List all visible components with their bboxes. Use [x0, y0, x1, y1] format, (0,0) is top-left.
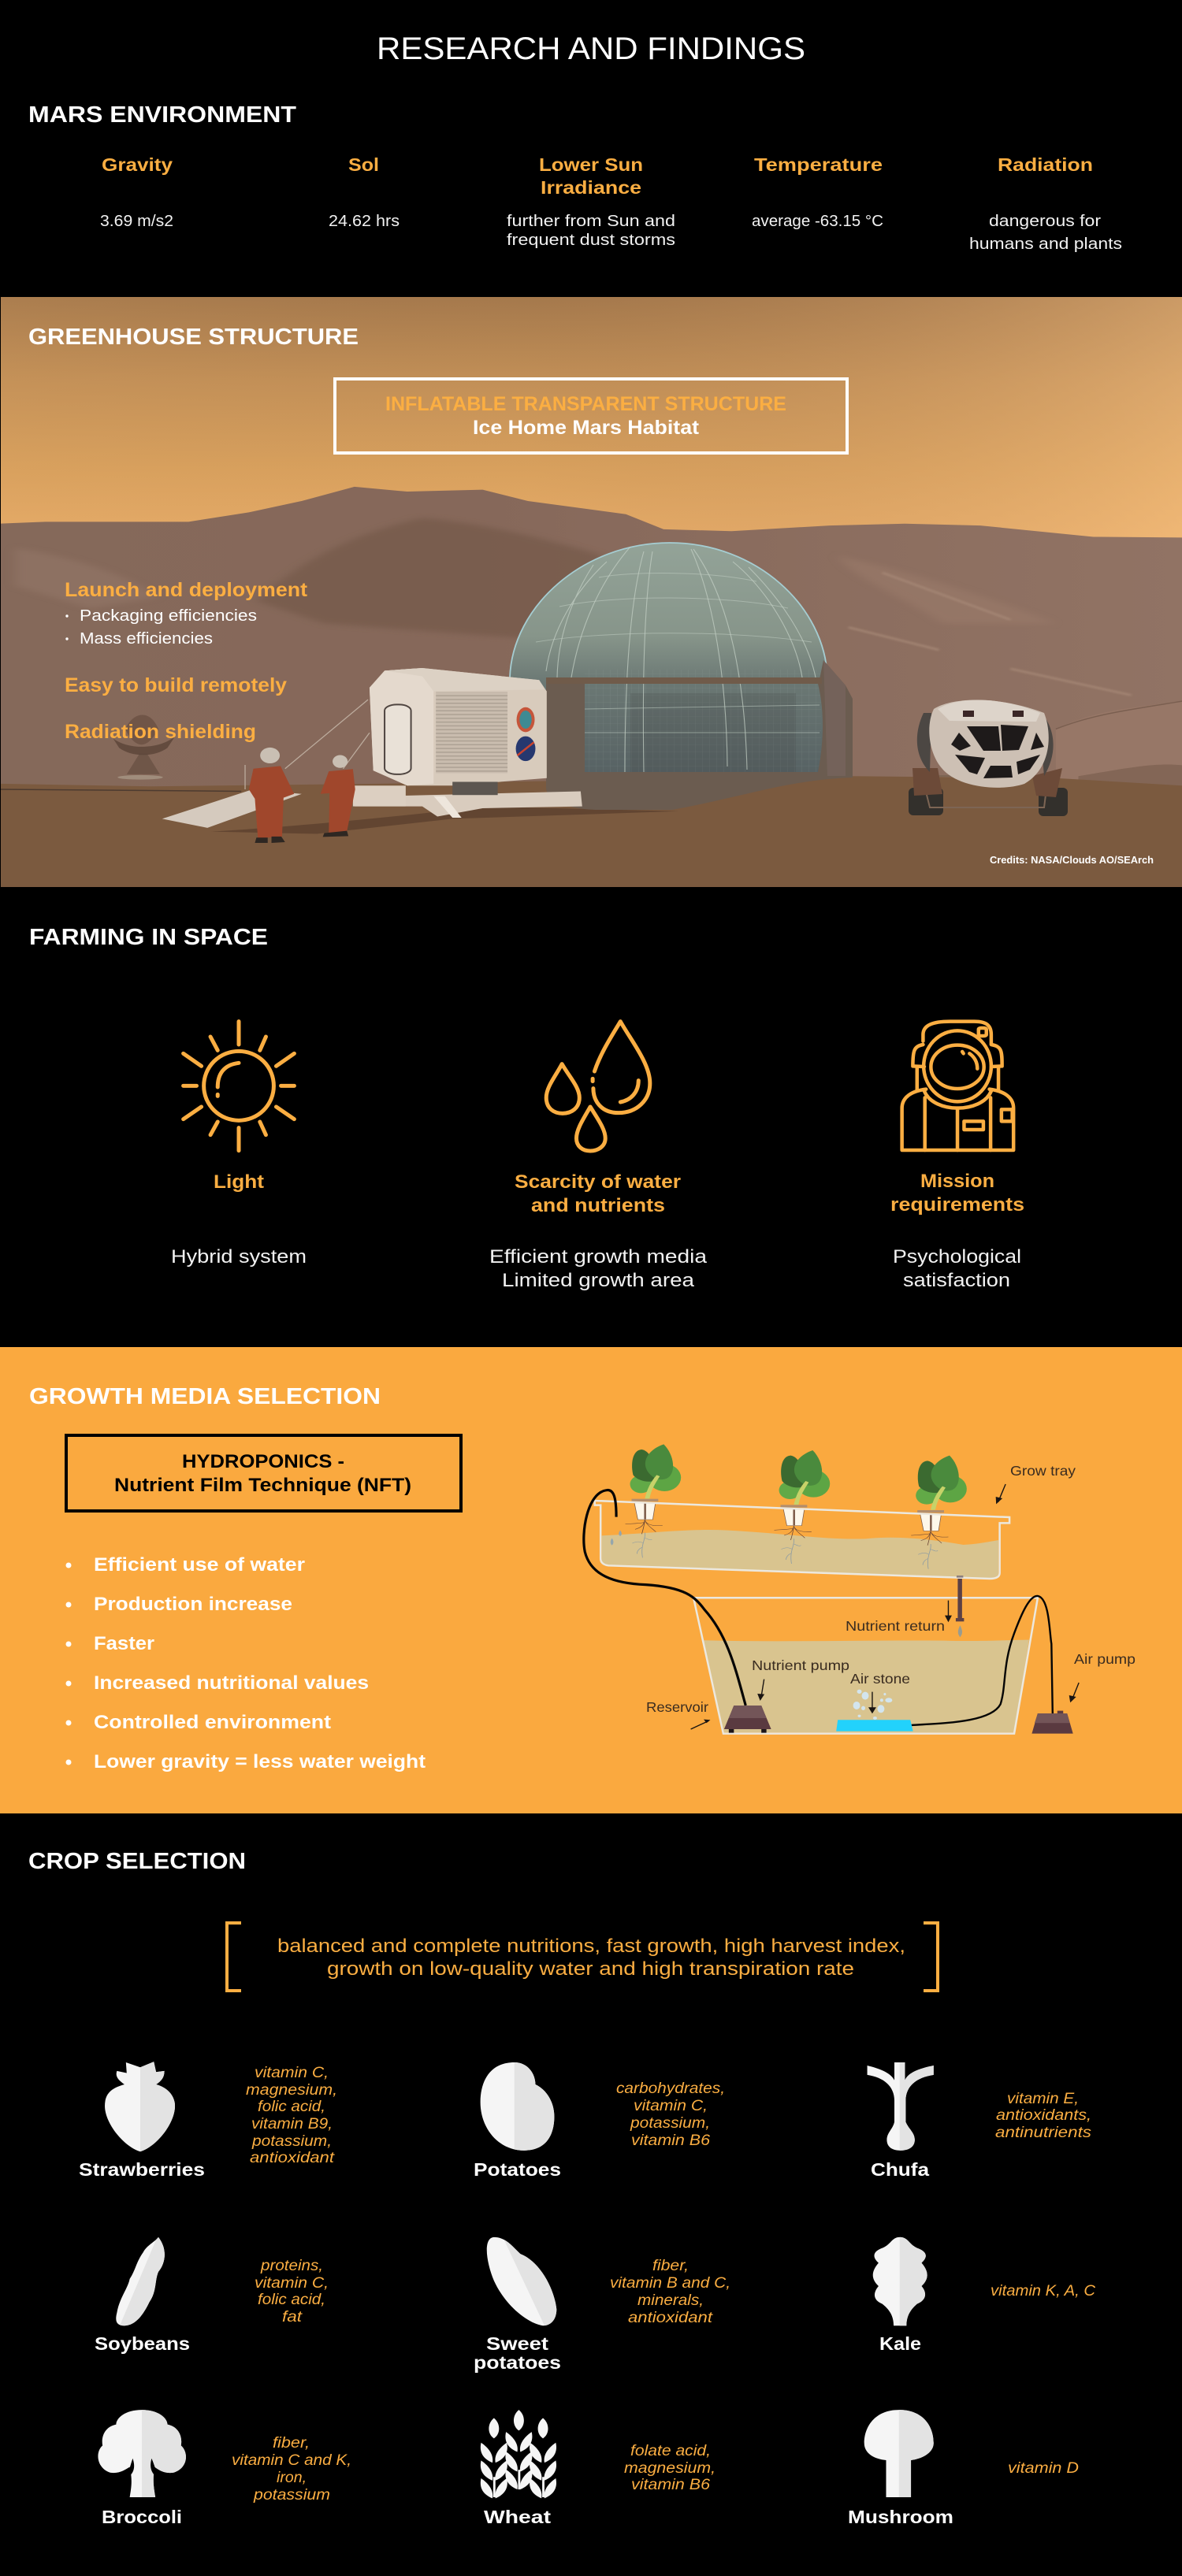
column: temperature: average -63.15 °C — [752, 213, 883, 230]
rover — [909, 700, 1068, 816]
column: gravity: 3.69 m/s2 — [100, 213, 173, 230]
nutrients: chufa: antinutrients — [995, 2125, 1092, 2141]
nutrients: broccoli: vitamin C and K, — [232, 2452, 351, 2469]
crop: kale: Kale — [879, 2333, 921, 2354]
callout box: hydroponics: HYDROPONICS - — [182, 1451, 344, 1472]
label: mission requirements: satisfaction — [903, 1270, 1010, 1291]
callout box: hydroponics — [66, 1435, 461, 1511]
air pump — [1031, 1711, 1073, 1734]
column: temperature: Temperature — [754, 154, 883, 175]
diagram labels: Nutrient return — [846, 1618, 945, 1634]
crop: potatoes: Potatoes — [474, 2159, 561, 2180]
crop: wheat: Wheat — [484, 2507, 551, 2527]
reservoir water — [704, 1640, 1029, 1732]
icon: soybean — [116, 2237, 165, 2325]
crop: mushroom — [848, 2410, 1079, 2527]
crop: wheat — [481, 2410, 716, 2527]
feature list: Radiation shielding — [65, 721, 256, 743]
heading: mars environment: MARS ENVIRONMENT — [28, 102, 297, 128]
nutrients: wheat: folate acid, — [630, 2443, 711, 2459]
nutrients: strawberries: potassium, — [251, 2133, 332, 2150]
nutrients: sweet potatoes: fiber, — [652, 2258, 689, 2274]
column: radiation — [969, 154, 1122, 253]
benefits list: Increased nutritional values — [94, 1672, 369, 1694]
icon: sweet potato — [487, 2237, 556, 2325]
column: lower sun irradiance: further from Sun and — [507, 213, 675, 230]
diagram labels: Reservoir — [646, 1699, 708, 1715]
icon: broccoli — [98, 2410, 186, 2497]
crop: chufa — [868, 2062, 1092, 2180]
antenna — [113, 715, 175, 780]
crop: sweet potatoes — [474, 2237, 730, 2373]
astronaut 2 — [321, 755, 355, 837]
label: mission requirements — [890, 1171, 1024, 1291]
crop: soybeans: Soybeans — [95, 2333, 190, 2354]
panel: farming in space — [29, 925, 1024, 1291]
feature list: Easy to build remotely — [65, 674, 287, 696]
benefits list: Lower gravity = less water weight — [94, 1751, 426, 1772]
crop: mushroom: Mushroom — [848, 2507, 953, 2527]
title: RESEARCH AND FINDINGS — [377, 32, 805, 66]
label: light — [171, 1171, 307, 1268]
crop: broccoli — [98, 2410, 351, 2527]
mars scene illustration — [0, 297, 1182, 891]
criteria bracket callout — [227, 1923, 938, 1991]
nutrients: soybeans: fat — [282, 2309, 303, 2325]
air tube — [912, 1596, 1053, 1725]
dome — [510, 543, 827, 776]
bubbles — [853, 1690, 892, 1720]
benefits list: Faster — [94, 1633, 154, 1654]
ramp — [162, 789, 302, 828]
label: mission requirements: Mission — [920, 1171, 994, 1192]
nutrients: potatoes — [616, 2080, 725, 2149]
grow tray water — [602, 1530, 998, 1578]
heading: farming in space: FARMING IN SPACE — [29, 925, 268, 950]
fabric base — [546, 660, 853, 810]
column: sol: 24.62 hrs — [329, 213, 400, 230]
feature list: Mass efficiencies — [80, 630, 213, 648]
nutrients: strawberries: vitamin C, — [255, 2065, 329, 2081]
feature list — [65, 579, 308, 743]
nutrients: sweet potatoes: minerals, — [637, 2292, 704, 2309]
label: scarcity of water and nutrients: Scarcity of water — [515, 1171, 681, 1193]
column: lower sun irradiance — [507, 154, 675, 249]
nutrients: soybeans: vitamin C, — [255, 2275, 329, 2292]
feature list: Launch and deployment — [65, 579, 308, 601]
nutrients: wheat — [624, 2443, 716, 2493]
plant 1 — [626, 1444, 681, 1557]
column: lower sun irradiance: Irradiance — [541, 177, 641, 198]
crop: strawberries: Strawberries — [79, 2159, 205, 2180]
nutrient tube — [584, 1490, 745, 1706]
label: scarcity of water and nutrients — [489, 1171, 708, 1291]
crop: chufa: Chufa — [871, 2159, 929, 2180]
column: gravity: Gravity — [102, 154, 173, 175]
diagram labels: Air pump — [1074, 1651, 1136, 1667]
crop: sweet potatoes: Sweet — [486, 2333, 548, 2354]
crop: potatoes — [474, 2062, 725, 2180]
nutrients: strawberries: magnesium, — [246, 2082, 337, 2099]
heading: greenhouse structure: GREENHOUSE STRUCTURE — [28, 325, 359, 350]
icon: potato — [481, 2062, 554, 2151]
diagram labels: Grow tray — [1010, 1463, 1076, 1479]
label: scarcity of water and nutrients: and nutrients — [531, 1195, 665, 1216]
nutrients: chufa: vitamin E, — [1007, 2091, 1079, 2107]
arrowheads — [704, 1497, 1076, 1723]
nutrients: chufa: antioxidants, — [996, 2107, 1091, 2124]
nutrients: potatoes: carbohydrates, — [616, 2080, 725, 2097]
nutrients: soybeans: folic acid, — [258, 2292, 325, 2308]
callout box: INFLATABLE TRANSPARENT STRUCTURE — [385, 393, 786, 415]
plant 2 — [775, 1450, 830, 1564]
nutrients: potatoes: vitamin B6 — [631, 2132, 710, 2149]
nutrients: sweet potatoes: vitamin B and C, — [610, 2275, 730, 2292]
label: mission requirements: requirements — [890, 1194, 1024, 1216]
air stone — [836, 1720, 913, 1732]
column: gravity — [100, 154, 173, 230]
crop: soybeans — [95, 2237, 329, 2354]
panel: mars environment — [28, 102, 1122, 253]
panel: growth media selection — [0, 1347, 1182, 1813]
callout box: Ice Home Mars Habitat — [473, 417, 700, 439]
nutrients: soybeans: proteins, — [260, 2258, 323, 2274]
support struts — [245, 700, 370, 789]
feature list: Packaging efficiencies — [80, 607, 257, 625]
grow tray — [595, 1501, 1009, 1579]
nutrients: broccoli — [232, 2435, 351, 2504]
plant 3 — [911, 1456, 967, 1569]
nutrients: wheat: magnesium, — [624, 2460, 716, 2477]
column: temperature — [752, 154, 883, 230]
nutrients: mushroom: vitamin D — [1008, 2460, 1079, 2477]
column: radiation: humans and plants — [969, 236, 1122, 253]
icon: water drops — [546, 1022, 650, 1151]
callout box — [335, 379, 847, 453]
column: sol: Sol — [348, 154, 379, 175]
heading: crop selection: CROP SELECTION — [28, 1849, 246, 1874]
label: scarcity of water and nutrients: Efficient growth media — [489, 1246, 708, 1268]
diagram labels — [646, 1463, 1136, 1715]
nutrients: strawberries — [246, 2065, 337, 2166]
reservoir tank — [693, 1598, 1038, 1734]
icon: kale — [873, 2237, 927, 2325]
nutrients: kale: vitamin K, A, C — [991, 2283, 1095, 2299]
icon: sun — [184, 1022, 294, 1151]
water drips — [611, 1531, 622, 1546]
nutrients: broccoli: potassium — [253, 2487, 330, 2504]
criteria bracket callout: growth on low-quality water and high transpiration rate — [327, 1958, 854, 1980]
icon: mushroom — [864, 2410, 934, 2497]
benefits list — [66, 1554, 426, 1772]
panel: crop selection — [28, 1849, 1095, 2527]
column: lower sun irradiance: frequent dust storms — [507, 232, 675, 249]
nutrients: broccoli: fiber, — [273, 2435, 310, 2452]
benefits list: Efficient use of water — [94, 1554, 305, 1576]
nutrients: strawberries: folic acid, — [258, 2099, 325, 2115]
column: radiation: dangerous for — [989, 213, 1101, 230]
icon: chufa — [868, 2062, 934, 2151]
icon: strawberry — [105, 2062, 175, 2151]
diagram labels: Air stone — [850, 1671, 910, 1687]
hydroponic system diagram — [584, 1444, 1136, 1734]
label: mission requirements: Psychological — [893, 1246, 1021, 1268]
arrows — [691, 1484, 1079, 1729]
crop: strawberries — [79, 2062, 337, 2180]
heading: growth media selection: GROWTH MEDIA SELECTION — [29, 1384, 381, 1409]
crop: kale — [873, 2237, 1095, 2354]
nutrients: sweet potatoes: antioxidant — [628, 2310, 713, 2326]
cargo module — [353, 668, 582, 818]
criteria bracket callout: balanced and complete nutritions, fast growth, high harvest index, — [277, 1936, 905, 1957]
icon: astronaut — [902, 1022, 1013, 1150]
return pipe — [956, 1576, 964, 1637]
column: radiation: Radiation — [998, 154, 1093, 175]
nutrients: soybeans — [255, 2258, 329, 2325]
column: lower sun irradiance: Lower Sun — [539, 154, 643, 175]
benefits list: Production increase — [94, 1594, 292, 1615]
diagram labels: Nutrient pump — [752, 1657, 849, 1673]
label: light: Hybrid system — [171, 1246, 307, 1268]
nutrient pump — [724, 1706, 771, 1733]
nutrients: wheat: vitamin B6 — [631, 2477, 710, 2493]
label: light: Light — [214, 1171, 264, 1193]
crop: sweet potatoes: potatoes — [474, 2352, 561, 2373]
nutrients: sweet potatoes — [610, 2258, 730, 2326]
icon: wheat — [481, 2410, 556, 2498]
nutrients: strawberries: antioxidant — [250, 2150, 335, 2166]
nutrients: potatoes: potassium, — [630, 2115, 710, 2132]
image credit: Credits: NASA/Clouds AO/SEArch — [990, 854, 1154, 866]
nutrients: chufa — [995, 2091, 1092, 2141]
nutrients: broccoli: iron, — [277, 2470, 307, 2486]
callout box: hydroponics: Nutrient Film Technique (NFT) — [114, 1475, 411, 1496]
shadow under module — [211, 807, 678, 834]
nutrients: potatoes: vitamin C, — [634, 2098, 708, 2114]
benefits list: Controlled environment — [94, 1712, 331, 1733]
nutrients: strawberries: vitamin B9, — [251, 2116, 333, 2132]
label: scarcity of water and nutrients: Limited growth area — [502, 1270, 695, 1291]
column: sol — [329, 154, 400, 230]
panel: greenhouse structure — [0, 297, 1182, 891]
crop: broccoli: Broccoli — [102, 2507, 182, 2527]
astronaut 1 — [249, 748, 294, 843]
